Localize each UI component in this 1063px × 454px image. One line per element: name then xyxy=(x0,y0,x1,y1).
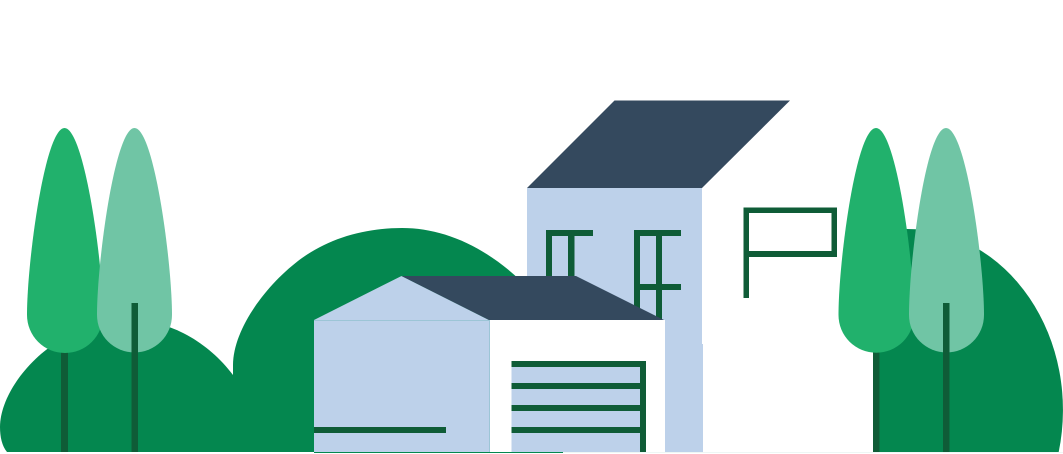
middle bush xyxy=(233,228,532,452)
garage door xyxy=(512,361,646,452)
garage white wall xyxy=(490,320,665,452)
tall house window left xyxy=(546,230,593,320)
tall house window right xyxy=(634,230,681,320)
left tree 2 xyxy=(97,128,172,452)
right tree 1 xyxy=(838,128,914,452)
tall house xyxy=(527,100,837,452)
tall house side window xyxy=(744,208,837,298)
tall house front wall xyxy=(527,188,703,452)
tall house roof xyxy=(527,100,790,188)
garage wall seam xyxy=(314,320,490,452)
garage gable wall xyxy=(314,276,489,452)
garage roof xyxy=(402,276,664,320)
left tree 1 xyxy=(27,128,103,452)
ground line xyxy=(314,452,1063,453)
right bush xyxy=(873,229,1063,452)
garage xyxy=(314,276,665,452)
right tree 2 xyxy=(909,128,984,452)
garage side line xyxy=(314,427,446,433)
left bush xyxy=(0,320,250,452)
